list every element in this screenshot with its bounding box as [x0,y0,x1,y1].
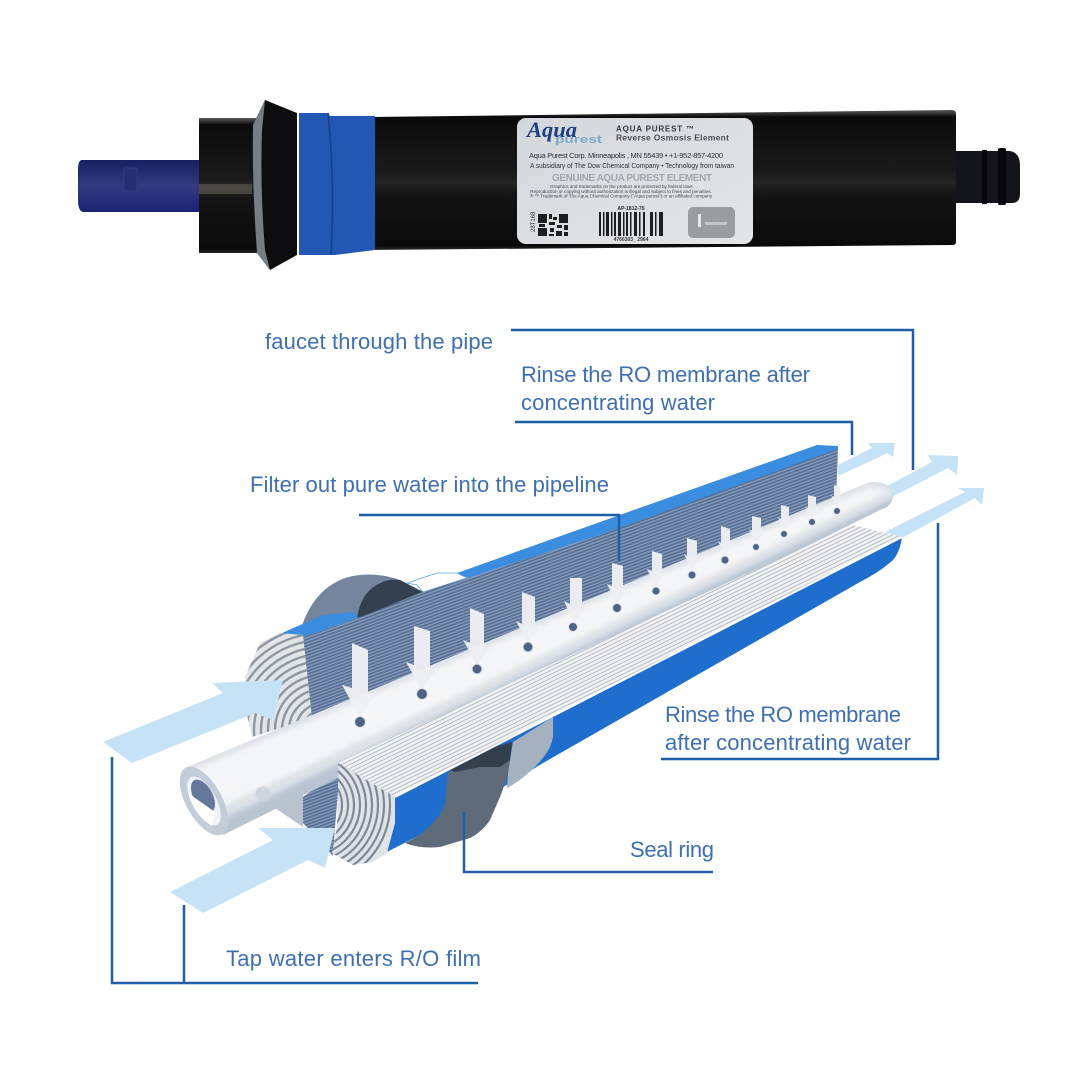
label heading: AQUA PUREST ™ [616,124,694,134]
callout: seal ring: Seal ring [630,837,714,862]
callout: tap water enters: Tap water enters R/O film [226,946,481,971]
central permeate pipe [180,470,900,835]
callout: seal ring [464,812,714,872]
callout: filter out pure water [250,472,619,561]
product photo: RO membrane element [78,100,1020,270]
upper striped membrane layers [303,449,838,725]
callout: rinse upper [515,362,852,455]
upper blue membrane edge [282,445,838,637]
logo: purest [555,134,602,146]
label company text: Aqua Purest Corp. Minneapolis , MN 55439 • +1-952-857-4200 [529,151,723,160]
batch code: 28T168 [531,211,537,232]
callout: faucet through the pipe: faucet through the pipe [265,329,493,354]
white flow arrows into pipe holes [342,485,843,717]
cutaway diagram of the membrane [103,443,984,913]
legal text: ® ™ Trademark of The Aqua Chemical Company ("Aqua purest") or an affiliated company [530,192,713,198]
black end cap [199,118,259,253]
blue inlet stub [78,160,199,212]
upper spiral end face [245,633,312,737]
legal text: Reproduction or copying without authorization is illegal and subject to fines and penalties. [530,189,712,194]
pipe open end [170,759,238,843]
pipe side hole [256,786,270,802]
highlight on lower membrane edge [395,537,902,797]
arrow: tap water inflow, lower [170,828,335,913]
model number: AP-1812-75 [618,206,645,212]
legal text [530,184,713,198]
lower striped membrane layers [338,525,902,797]
black flange with grey rim [253,100,297,270]
arrow: outflow, upper right [838,443,895,476]
callout: rinse lower: Rinse the RO membrane [665,702,901,727]
lower seal ring [405,717,553,848]
callout: faucet through the pipe [265,329,913,470]
upper seal ring [300,574,423,632]
product label [517,117,753,244]
callout: rinse lower [661,523,938,759]
lower rear layers behind the pipe [272,770,340,856]
genuine stamp: GENUINE AQUA PUREST ELEMENT [552,173,712,184]
callout: rinse lower: after concentrating water [665,730,911,755]
callout: tap water enters [112,757,481,983]
barcode [599,212,663,236]
logo: Aqua [525,117,577,142]
QR code [538,214,568,236]
logo [525,117,602,146]
main black housing [370,110,956,250]
callout: rinse upper: concentrating water [521,390,715,415]
arrow: outflow, lower right [885,488,984,538]
arrow: outflow, pure water [885,455,958,498]
label company text [529,151,734,170]
lower blue membrane shell [385,537,902,853]
label heading [616,124,729,142]
label company text: A subsidiary of The Dow Chemical Company • Technology from taiwan [530,161,734,170]
threaded outlet end [956,148,1020,205]
hologram sticker [688,207,735,238]
barcode digits: 4766303_ 2964 [614,237,649,243]
pipe holes [354,508,840,728]
callout: rinse upper: Rinse the RO membrane after [521,362,810,387]
callout: filter out pure water: Filter out pure water into the pipeline [250,472,609,497]
arrow: tap water inflow, upper [103,680,283,763]
blue seal band [299,113,375,255]
lower spiral end face [332,763,395,865]
legal text: Graphics and trademarks on the product are protected by federal laws. [550,184,694,189]
label heading: Reverse Osmosis Element [616,132,729,142]
